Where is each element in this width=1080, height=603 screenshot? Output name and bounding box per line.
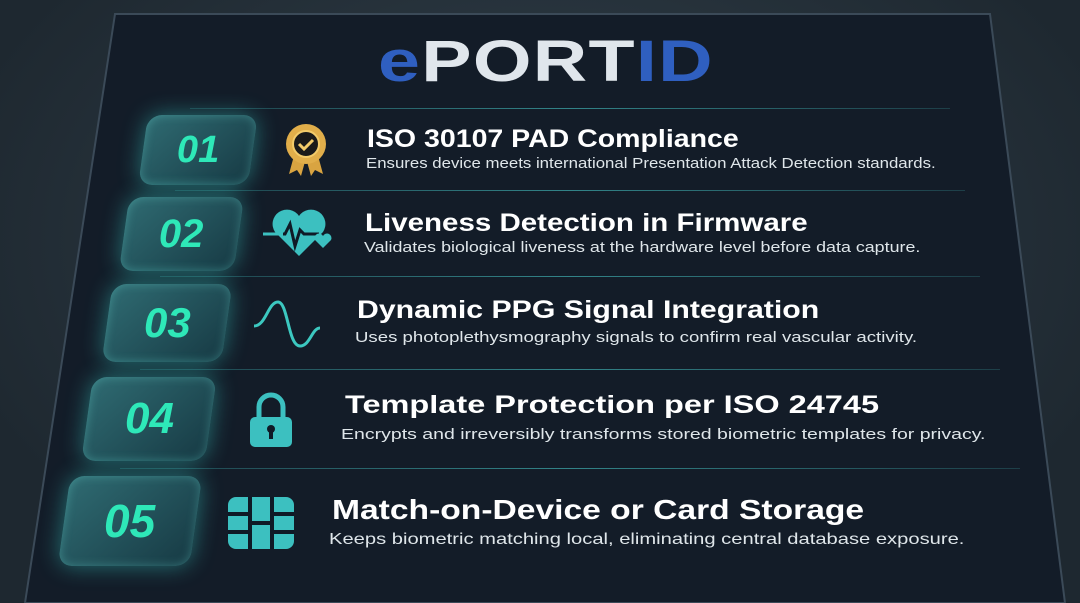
desc 5: Keeps biometric matching local, eliminating central database exposure.: [329, 531, 964, 548]
icon: award medal: [286, 124, 326, 176]
badge 03: 03: [144, 299, 190, 346]
row 3: [92, 272, 917, 375]
icon: padlock: [250, 392, 292, 447]
badge 04: [81, 377, 217, 461]
badge 03: [102, 284, 232, 362]
badge 02: [119, 197, 244, 271]
title 2: Liveness Detection in Firmware: [365, 209, 808, 237]
desc 3: Uses photoplethysmography signals to confirm real vascular activity.: [355, 329, 917, 346]
badge 05: [58, 476, 202, 566]
badge 02: 02: [159, 212, 204, 256]
desc 1: Ensures device meets international Presentation Attack Detection standards.: [366, 155, 936, 172]
row 4: [71, 364, 985, 474]
icon: ppg wave: [254, 300, 320, 348]
title 1: ISO 30107 PAD Compliance: [367, 125, 739, 153]
badge 01: [138, 115, 258, 185]
icon: heart pulse: [263, 210, 332, 256]
title 5: Match-on-Device or Card Storage: [332, 494, 864, 525]
desc 2: Validates biological liveness at the hardware level before data capture.: [364, 239, 920, 256]
row 2: [109, 185, 920, 283]
title 4: Template Protection per ISO 24745: [345, 391, 879, 419]
badge 04: 04: [125, 394, 173, 443]
title 3: Dynamic PPG Signal Integration: [357, 296, 819, 324]
row 5: [48, 464, 964, 580]
desc 4: Encrypts and irreversibly transforms stored biometric templates for privacy.: [341, 426, 985, 443]
badge 05: 05: [104, 495, 156, 547]
row 1: [128, 102, 936, 197]
icon: smart chip: [228, 497, 294, 549]
badge 01: 01: [177, 128, 219, 170]
title: ePORTID: [378, 29, 714, 94]
